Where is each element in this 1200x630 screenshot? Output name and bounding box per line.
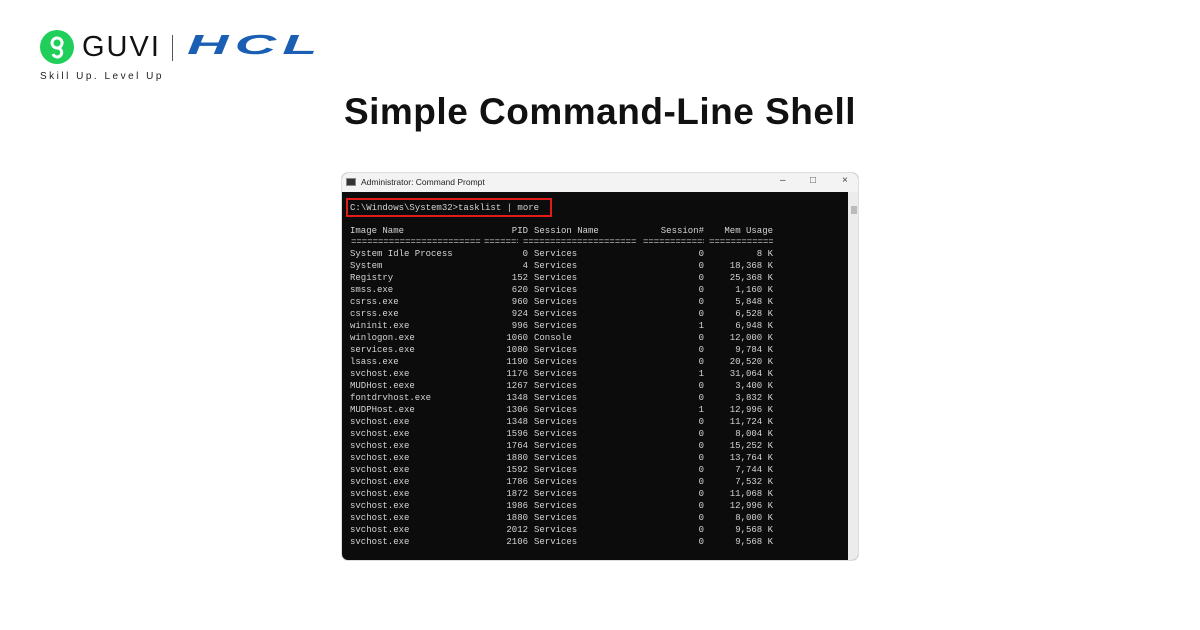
terminal text: 2106 (506, 537, 528, 547)
terminal text: 0 (699, 417, 704, 427)
terminal text: 9,568 K (735, 537, 773, 547)
command highlight box (346, 198, 552, 217)
terminal text: 5,848 K (735, 297, 773, 307)
terminal text: Services (534, 381, 577, 391)
terminal text: 15,252 K (730, 441, 773, 451)
terminal text: C:\Windows\System32>tasklist | more (350, 203, 539, 213)
terminal text: svchost.exe (350, 369, 409, 379)
terminal text: csrss.exe (350, 297, 399, 307)
terminal text: Services (534, 525, 577, 535)
terminal text: 1880 (506, 453, 528, 463)
terminal text: 1267 (506, 381, 528, 391)
terminal text: 0 (699, 297, 704, 307)
terminal text: 3,400 K (735, 381, 773, 391)
terminal text: 0 (699, 345, 704, 355)
terminal text: 1596 (506, 429, 528, 439)
terminal text: PID (512, 226, 528, 236)
terminal text: svchost.exe (350, 477, 409, 487)
terminal text: services.exe (350, 345, 415, 355)
terminal text: 0 (699, 285, 704, 295)
terminal text: 20,520 K (730, 357, 773, 367)
terminal text: 960 (512, 297, 528, 307)
terminal text: 0 (699, 381, 704, 391)
terminal text: fontdrvhost.exe (350, 393, 431, 403)
terminal text: 0 (699, 357, 704, 367)
terminal text: Services (534, 453, 577, 463)
terminal text: 1306 (506, 405, 528, 415)
terminal text: 620 (512, 285, 528, 295)
terminal text: Session Name (534, 226, 599, 236)
divider (172, 35, 173, 61)
terminal text: 0 (699, 261, 704, 271)
terminal text: Services (534, 513, 577, 523)
terminal text: 0 (699, 477, 704, 487)
terminal text: 1880 (506, 513, 528, 523)
terminal text: 1 (699, 369, 704, 379)
terminal text: svchost.exe (350, 429, 409, 439)
terminal text: 12,996 K (730, 501, 773, 511)
terminal text: 4 (523, 261, 528, 271)
window controls: × (842, 175, 848, 186)
terminal text: csrss.exe (350, 309, 399, 319)
terminal text: MUDPHost.exe (350, 405, 415, 415)
terminal text: 9,568 K (735, 525, 773, 535)
terminal text: 1592 (506, 465, 528, 475)
terminal text: System (350, 261, 382, 271)
tagline: Skill Up. Level Up (40, 71, 164, 82)
terminal text: smss.exe (350, 285, 393, 295)
terminal text: Services (534, 345, 577, 355)
terminal text: 1764 (506, 441, 528, 451)
terminal text: Services (534, 465, 577, 475)
terminal text: svchost.exe (350, 537, 409, 547)
terminal text: svchost.exe (350, 513, 409, 523)
terminal text: svchost.exe (350, 465, 409, 475)
HCL logo: HCL (187, 29, 323, 60)
terminal text: 12,996 K (730, 405, 773, 415)
terminal text: Services (534, 285, 577, 295)
terminal text: 924 (512, 309, 528, 319)
terminal text: Services (534, 393, 577, 403)
terminal text: 0 (699, 525, 704, 535)
terminal text: 11,068 K (730, 489, 773, 499)
terminal text: 1060 (506, 333, 528, 343)
terminal text: 8 K (757, 249, 773, 259)
terminal text: Image Name (350, 226, 404, 236)
terminal text: 1 (699, 405, 704, 415)
terminal text: 0 (699, 393, 704, 403)
terminal text: lsass.exe (350, 357, 399, 367)
terminal text: 1348 (506, 417, 528, 427)
terminal text: 7,744 K (735, 465, 773, 475)
terminal text: 12,000 K (730, 333, 773, 343)
command prompt window (341, 172, 859, 561)
title bar: Administrator: Command Prompt (361, 177, 485, 187)
terminal text: svchost.exe (350, 489, 409, 499)
terminal text: 13,764 K (730, 453, 773, 463)
terminal text: Services (534, 309, 577, 319)
terminal text: 0 (699, 453, 704, 463)
terminal text: Services (534, 321, 577, 331)
terminal text: 3,832 K (735, 393, 773, 403)
terminal text: 0 (699, 309, 704, 319)
terminal text: 18,368 K (730, 261, 773, 271)
terminal text: 1080 (506, 345, 528, 355)
terminal text: Services (534, 441, 577, 451)
title: Simple Command-Line Shell (344, 91, 856, 132)
terminal text: 1872 (506, 489, 528, 499)
terminal text: 0 (699, 465, 704, 475)
terminal text: MUDHost.eexe (350, 381, 415, 391)
terminal text: Services (534, 537, 577, 547)
terminal text: 152 (512, 273, 528, 283)
terminal text: Services (534, 405, 577, 415)
terminal text: 1,160 K (735, 285, 773, 295)
terminal text: Services (534, 501, 577, 511)
terminal text: Console (534, 333, 572, 343)
terminal text: Services (534, 357, 577, 367)
terminal text: Services (534, 261, 577, 271)
terminal text: 31,064 K (730, 369, 773, 379)
terminal text: Session# (661, 226, 704, 236)
terminal text: Services (534, 477, 577, 487)
terminal text: 9,784 K (735, 345, 773, 355)
window controls (780, 175, 848, 186)
terminal text: 0 (699, 429, 704, 439)
terminal text: 0 (699, 441, 704, 451)
terminal text: 0 (699, 249, 704, 259)
terminal text: Services (534, 297, 577, 307)
terminal text: Services (534, 429, 577, 439)
terminal text: 0 (699, 273, 704, 283)
terminal text: Services (534, 417, 577, 427)
terminal text: 0 (523, 249, 528, 259)
terminal text: 8,000 K (735, 513, 773, 523)
terminal text: svchost.exe (350, 525, 409, 535)
scrollbar (848, 192, 860, 562)
terminal text: Mem Usage (724, 226, 773, 236)
terminal text: Services (534, 369, 577, 379)
terminal text: 6,948 K (735, 321, 773, 331)
terminal text: wininit.exe (350, 321, 409, 331)
terminal text: 0 (699, 333, 704, 343)
terminal text: System Idle Process (350, 249, 453, 259)
terminal text: svchost.exe (350, 501, 409, 511)
terminal text: 1786 (506, 477, 528, 487)
terminal text: 996 (512, 321, 528, 331)
terminal text: 1986 (506, 501, 528, 511)
terminal text: svchost.exe (350, 417, 409, 427)
terminal text: 0 (699, 501, 704, 511)
icon: guvi green circle (40, 30, 74, 64)
terminal text (350, 203, 773, 547)
terminal text: 6,528 K (735, 309, 773, 319)
terminal text: Registry (350, 273, 393, 283)
terminal text: 1190 (506, 357, 528, 367)
terminal text: 0 (699, 537, 704, 547)
terminal text: 25,368 K (730, 273, 773, 283)
terminal text: 1176 (506, 369, 528, 379)
terminal text: svchost.exe (350, 453, 409, 463)
GUVI wordmark: GUVI (82, 31, 161, 63)
window controls: □ (810, 175, 816, 186)
terminal text: Services (534, 273, 577, 283)
terminal text: 0 (699, 513, 704, 523)
terminal text: 1348 (506, 393, 528, 403)
icon: cmd (346, 178, 356, 186)
terminal text: 7,532 K (735, 477, 773, 487)
terminal text: 11,724 K (730, 417, 773, 427)
terminal text: Services (534, 249, 577, 259)
terminal text: winlogon.exe (350, 333, 415, 343)
window controls: – (780, 175, 786, 186)
logo (40, 29, 323, 82)
terminal text: ============ (709, 237, 773, 247)
terminal text: 2012 (506, 525, 528, 535)
terminal text: 0 (699, 489, 704, 499)
terminal text: 1 (699, 321, 704, 331)
terminal text: Services (534, 489, 577, 499)
terminal text: 8,004 K (735, 429, 773, 439)
title bar (342, 173, 860, 192)
terminal text: svchost.exe (350, 441, 409, 451)
